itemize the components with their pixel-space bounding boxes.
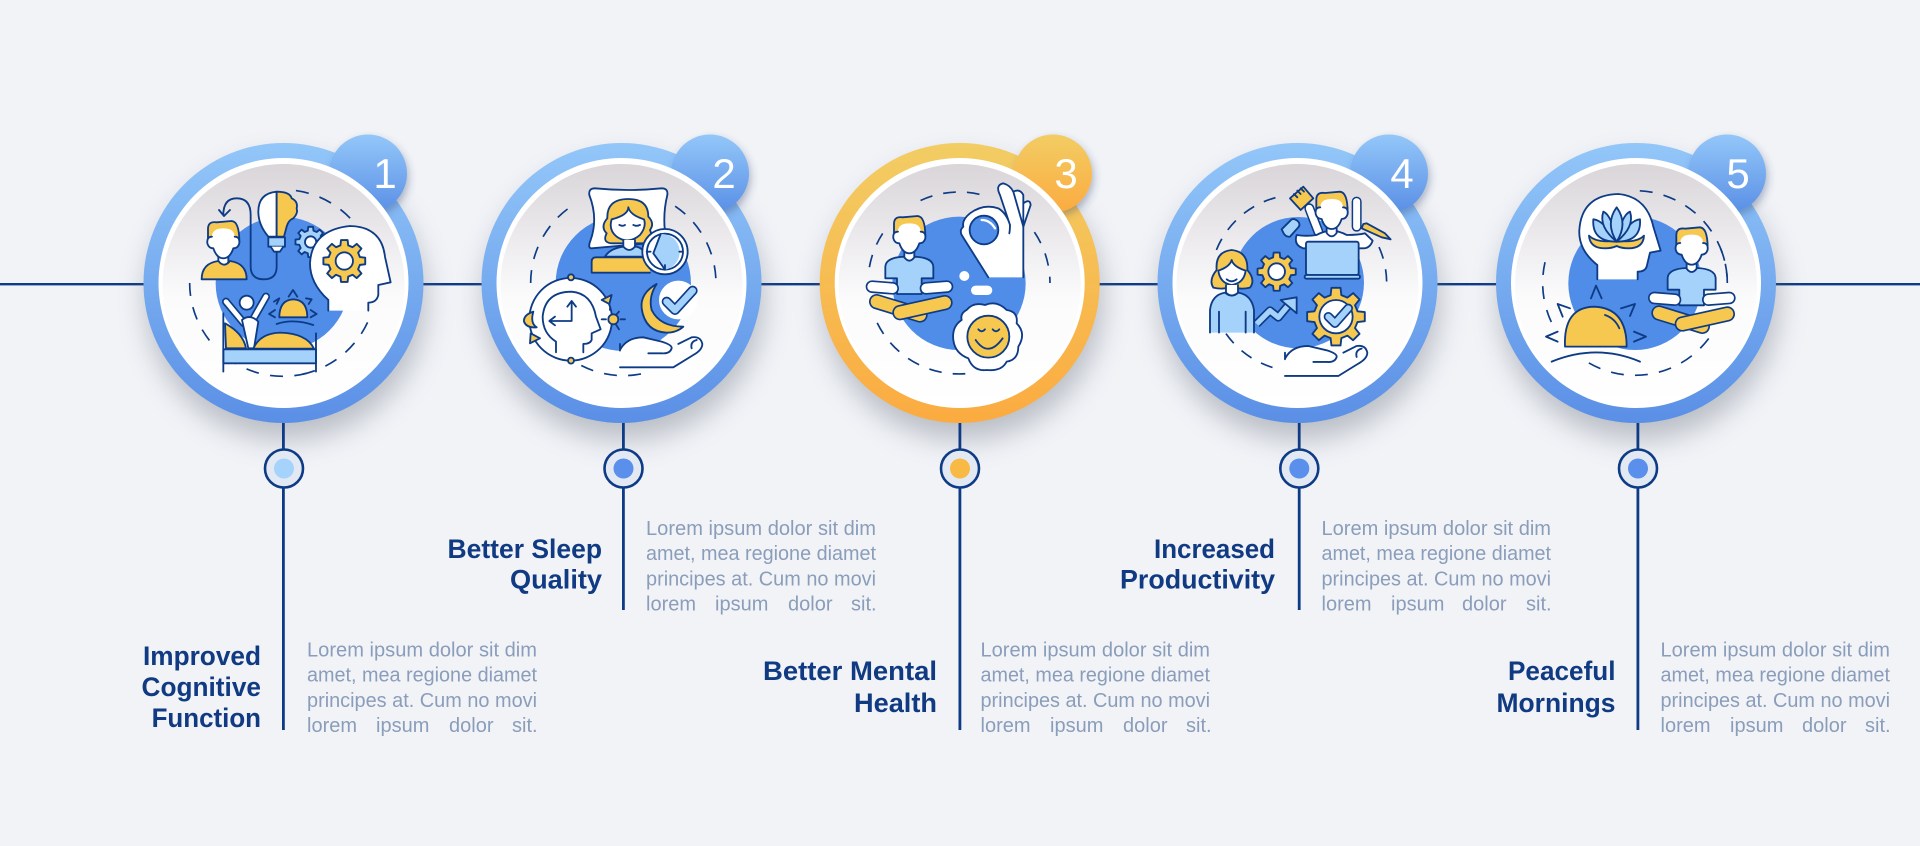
heading: Better Mental Health: Health [854, 688, 937, 718]
step 3 number badge [1014, 134, 1092, 212]
body text step 4: amet, mea regione diamet [1322, 543, 1551, 565]
heading: Improved Cognitive Function [142, 641, 261, 733]
step 5 plate [1511, 158, 1761, 408]
body text step 1: Lorem ipsum dolor sit dim [307, 640, 537, 662]
body text step 3 [980, 640, 1212, 737]
body text step 2: lorem [646, 594, 696, 616]
step 3 plate [835, 158, 1085, 408]
step 2 number badge [671, 134, 749, 212]
heading: Increased Productivity: Increased [1154, 534, 1275, 564]
body text step 5: amet, mea regione diamet [1660, 665, 1890, 687]
body text step 3: dolor [1123, 715, 1168, 737]
body text step 4: ipsum [1391, 594, 1444, 616]
heading: Increased Productivity [1120, 534, 1275, 594]
body text step 4: sit. [1526, 594, 1552, 616]
body text step 2: Lorem ipsum dolor sit dim [646, 518, 876, 540]
step 5 ring [1496, 143, 1776, 423]
heading: Increased Productivity: Productivity [1120, 564, 1275, 594]
connector: step 3 stem and node [941, 423, 979, 730]
body text step 3: sit. [1186, 715, 1212, 737]
step 1 plate [158, 158, 408, 408]
step 4 ring [1158, 143, 1438, 423]
heading: Better Sleep Quality: Quality [510, 564, 602, 594]
step 5 panel: circle with peaceful mornings icons [1496, 134, 1779, 440]
body text step 3: Lorem ipsum dolor sit dim [980, 640, 1210, 662]
horizontal timeline line [0, 283, 1920, 285]
step 2 plate [496, 158, 746, 408]
body text step 2 [646, 518, 877, 616]
heading: Better Sleep Quality [448, 534, 602, 594]
step 1 icon [190, 190, 391, 376]
step 5 icon [1543, 191, 1729, 375]
body text step 5 [1660, 640, 1891, 737]
step 4 panel: circle with increased productivity icons [1158, 134, 1440, 440]
body text step 2: amet, mea regione diamet [646, 543, 876, 565]
heading: Better Mental Health [763, 656, 937, 718]
step 3 panel: circle with better mental health icons (highlighted yellow) [820, 134, 1103, 440]
body text step 4: principes at. Cum no movi [1322, 569, 1551, 591]
connector: step 5 stem and node [1619, 423, 1657, 730]
body text step 1: sit. [512, 715, 538, 737]
step 4 icon [1210, 187, 1391, 376]
heading: Improved Cognitive Function: Cognitive [142, 672, 261, 702]
step 2 icon [524, 188, 716, 376]
body text step 1: dolor [449, 715, 494, 737]
heading: Improved Cognitive Function: Improved [143, 641, 261, 671]
body text step 4: Lorem ipsum dolor sit dim [1322, 518, 1551, 540]
step 1 panel: circle with improved cognitive function icons [144, 134, 426, 440]
connector: step 2 stem and node [604, 423, 642, 610]
heading: Better Mental Health: Better Mental [763, 656, 937, 686]
body text step 5: sit. [1865, 715, 1891, 737]
connector: step 4 stem and node [1280, 423, 1318, 610]
body text step 2: principes at. Cum no movi [646, 569, 876, 591]
step 2 number badge: 2 [712, 150, 736, 197]
body text step 5: Lorem ipsum dolor sit dim [1660, 640, 1890, 662]
heading: Better Sleep Quality: Better Sleep [448, 534, 602, 564]
body text step 4: lorem [1322, 594, 1372, 616]
step 4 number badge: 4 [1390, 150, 1414, 197]
step 5 number badge [1688, 134, 1766, 212]
body text step 4 [1322, 518, 1552, 616]
body text step 5: lorem [1660, 715, 1711, 737]
body text step 3: lorem [980, 715, 1031, 737]
heading: Peaceful Mornings: Mornings [1496, 688, 1616, 718]
heading: Improved Cognitive Function: Function [152, 703, 261, 733]
body text step 5: dolor [1802, 715, 1847, 737]
body text step 1: ipsum [376, 715, 429, 737]
body text step 5: principes at. Cum no movi [1660, 690, 1890, 712]
step 4 number badge [1350, 134, 1428, 212]
step 1 number badge: 1 [373, 150, 397, 197]
body text step 3: principes at. Cum no movi [980, 690, 1210, 712]
connector: step 1 stem and node [265, 423, 303, 730]
body text step 1: principes at. Cum no movi [307, 690, 537, 712]
body text step 2: sit. [851, 594, 877, 616]
body text step 2: ipsum [715, 594, 768, 616]
body text step 1: lorem [307, 715, 357, 737]
body text step 5: ipsum [1730, 715, 1783, 737]
body text step 4: dolor [1462, 594, 1507, 616]
step 4 plate [1172, 158, 1422, 408]
body text step 1 [307, 640, 538, 737]
step 3 ring [820, 143, 1100, 423]
step 2 panel: circle with better sleep quality icons [482, 134, 764, 440]
body text step 3: amet, mea regione diamet [980, 665, 1210, 687]
step 5 number badge: 5 [1726, 150, 1750, 197]
step 1 number badge [329, 134, 407, 212]
heading: Peaceful Mornings [1496, 656, 1616, 718]
body text step 1: amet, mea regione diamet [307, 665, 537, 687]
step 1 ring [144, 143, 424, 423]
body text step 2: dolor [788, 594, 833, 616]
step 3 number badge: 3 [1054, 150, 1078, 197]
heading: Peaceful Mornings: Peaceful [1508, 656, 1616, 686]
step 3 icon [868, 183, 1050, 374]
step 2 ring [482, 143, 762, 423]
body text step 3: ipsum [1050, 715, 1103, 737]
